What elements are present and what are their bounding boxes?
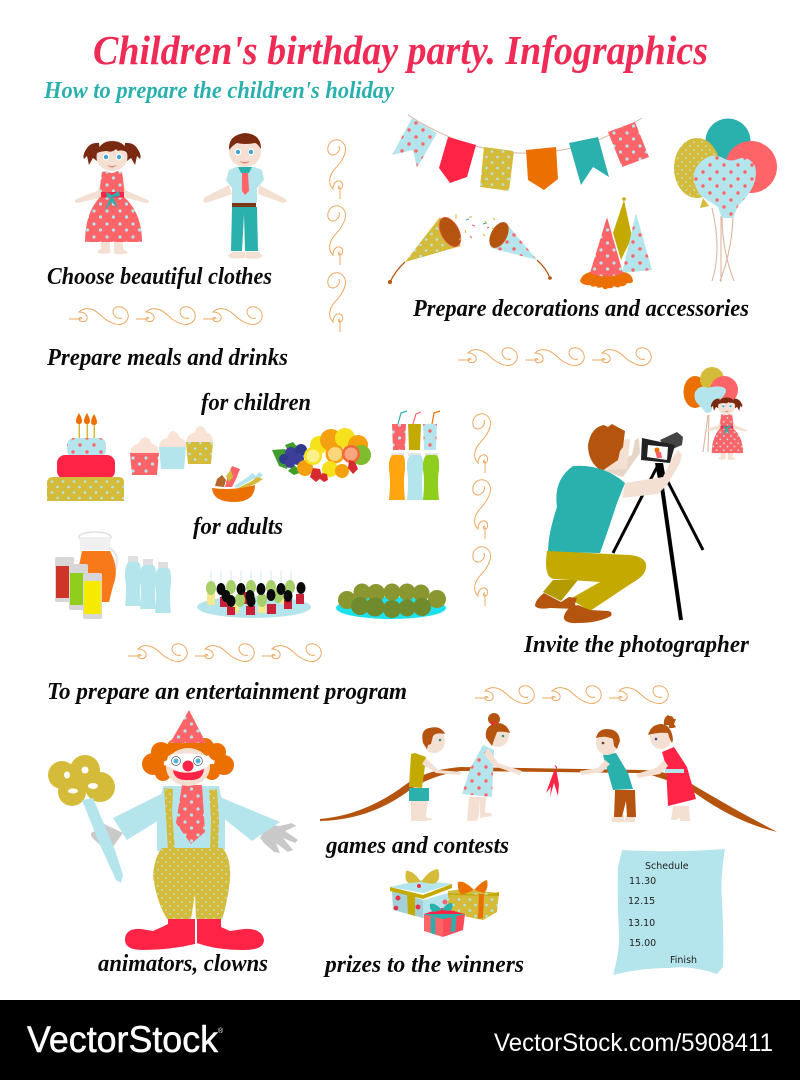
subheading: for children: for children [201,390,311,416]
swirl divider: right of entertainment heading [475,686,668,704]
small girl model [706,398,747,460]
swirl divider: above entertainment heading [128,644,321,662]
illustration: bunting [392,115,649,191]
ribbon [546,765,559,797]
panel: schedule paper: 13.10 [628,918,655,929]
swirl divider: right of meals heading [458,348,651,366]
heading: entertainment: To prepare an entertainment program [47,679,407,705]
illustration: party poppers [388,214,552,284]
panel: schedule paper: 15.00 [629,938,656,949]
illustration: gifts [390,869,499,937]
heading: clothes: Choose beautiful clothes [47,264,272,290]
footer bar: VectorStock.com/5908411 [494,1029,773,1057]
subtitle: How to prepare the children's holiday [43,78,394,104]
subheading: for adults: for adults [193,514,283,540]
illustration: birthday cake [47,413,124,501]
kid 2 [462,713,522,821]
illustration: canapes plate [197,571,311,618]
panel: schedule paper: Finish [670,955,697,966]
illustration: kids' drinks [389,411,440,500]
swirl divider: vertical [328,140,346,332]
swirl divider: vertical meals [473,414,491,606]
illustration: fruit pile [272,428,371,482]
illustration: water bottles [125,556,171,613]
kid 4 [636,715,696,821]
heading: prizes: prizes to the winners [323,952,524,978]
illustration: balloons with small girl [684,367,738,452]
heading: photographer: Invite the photographer [523,632,750,658]
illustration: boy in shirt [203,133,286,259]
illustration: candy bowl [212,466,263,502]
footer bar [0,1000,800,1080]
kid 1 [409,727,462,821]
panel: schedule paper: Schedule [645,861,689,872]
heading: meals: Prepare meals and drinks [46,345,288,371]
heading: decorations: Prepare decorations and accessories [412,296,749,322]
illustration: olive balls platter [336,584,446,619]
kid 3 [580,729,636,822]
rope [320,767,777,832]
panel: schedule paper: 12.15 [628,896,655,907]
illustration: cupcakes [130,426,213,475]
illustration: photographer [535,424,703,623]
illustration: balloons [674,118,777,282]
heading: games: games and contests [325,833,509,859]
swirl divider: under clothes [69,307,262,325]
title: Children's birthday party. Infographics [93,27,708,73]
illustration: party hats [580,197,652,289]
illustration: clown [48,710,298,950]
illustration: tug of war [320,713,777,832]
illustration: girl in dress [75,141,149,254]
panel: schedule paper [613,849,725,975]
footer bar: ® [218,1027,224,1035]
footer bar: VectorStock [27,1019,218,1060]
panel: schedule paper: 11.30 [629,876,656,887]
illustration: jug and glasses [55,532,117,619]
heading: animators: animators, clowns [98,951,268,977]
